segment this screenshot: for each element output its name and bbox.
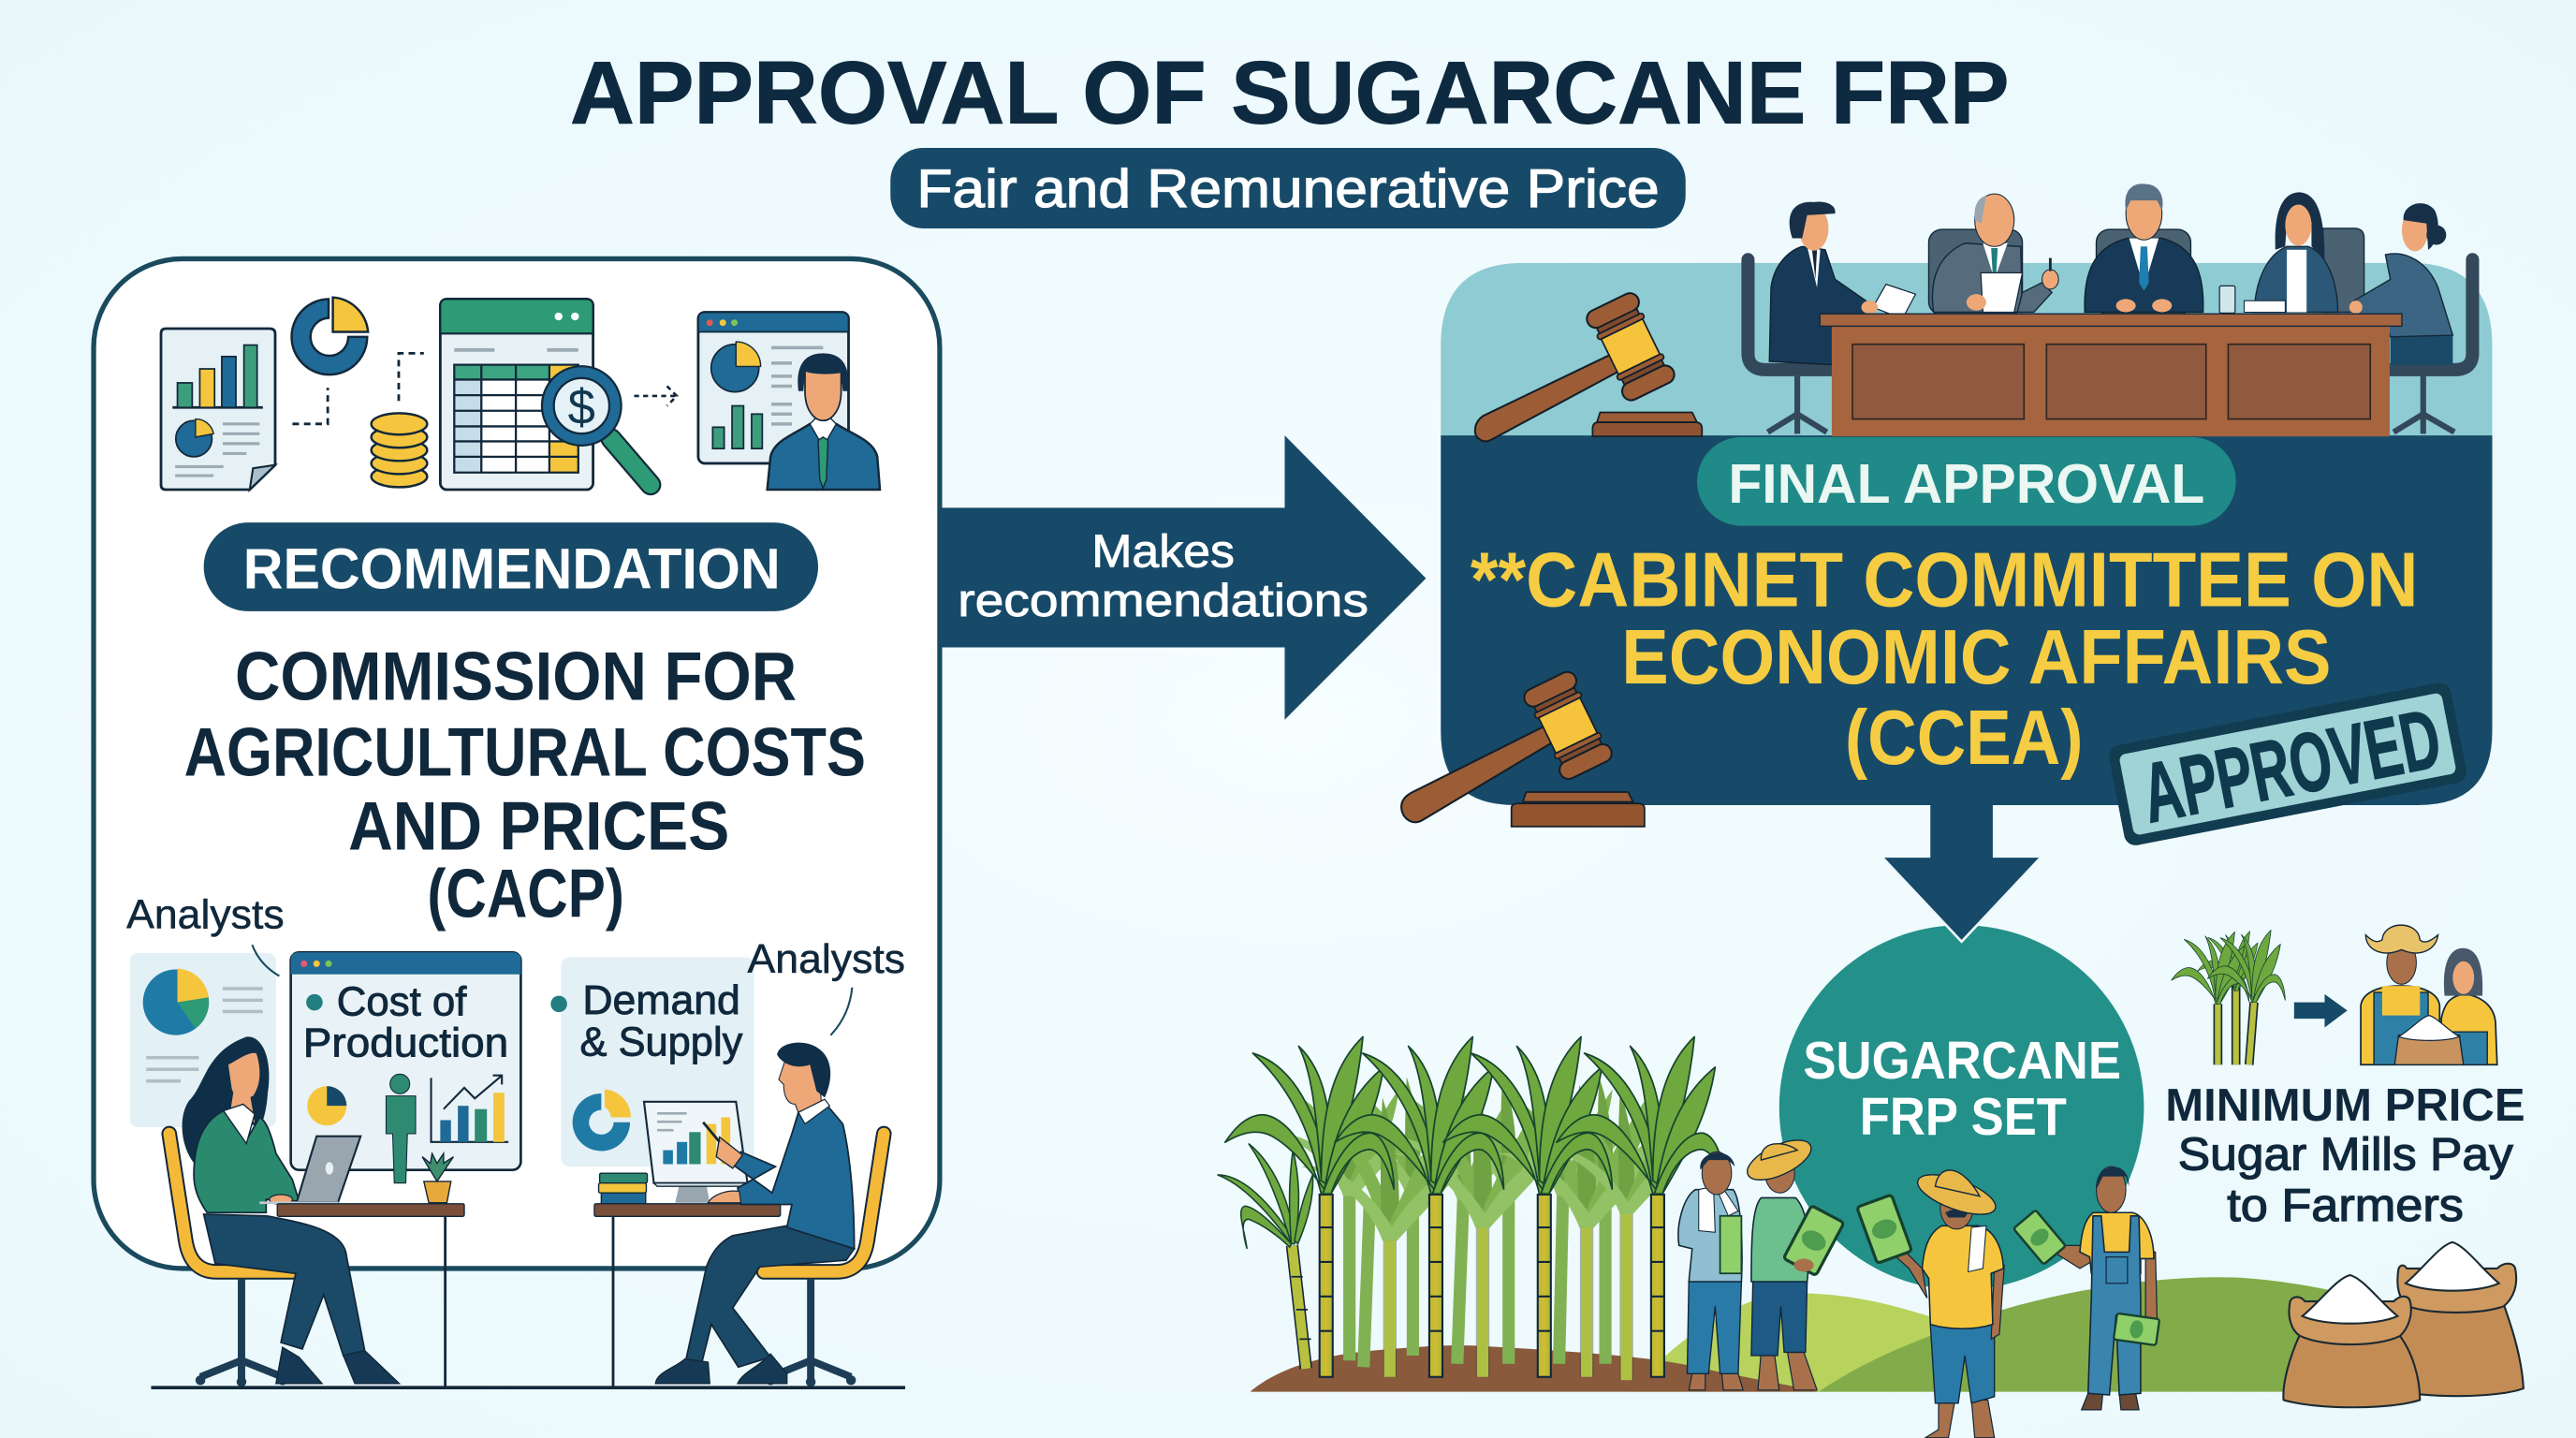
arrow: makes recommendations [940, 435, 1426, 720]
FRP set circle: FRP SET [1860, 1087, 2067, 1146]
icon: small cane stalks [2172, 931, 2285, 1064]
heading: commission: AND PRICES [348, 786, 729, 864]
card: cost of production: Production [303, 1020, 508, 1066]
icon: computer monitor [644, 1102, 748, 1203]
heading: commission: AGRICULTURAL COSTS [184, 712, 866, 790]
icon: arrow to farmers [2294, 994, 2348, 1027]
minimum price text: Sugar Mills Pay [2178, 1130, 2513, 1181]
member 5 [2349, 203, 2472, 433]
front stalks [1320, 1195, 1664, 1377]
front sack [2283, 1275, 2420, 1407]
member 2 [1928, 194, 2058, 315]
minimum price text: MINIMUM PRICE [2165, 1080, 2525, 1131]
icon: spreadsheet with magnifier [440, 299, 651, 490]
back stalks [1276, 1072, 1695, 1380]
back sack [2395, 1242, 2524, 1396]
member 4 [2244, 192, 2364, 312]
card: demand and supply [550, 958, 754, 1167]
connector dashes [292, 353, 424, 424]
figure: man analyst [655, 1043, 884, 1387]
subtitle pill: Fair and Remunerative Price [916, 159, 1660, 219]
icon: spreadsheet with magnifier: $ [568, 380, 595, 435]
icon: gavel on navy panel [1401, 668, 1645, 827]
card: demand and supply: & Supply [580, 1019, 742, 1064]
icon: farmers with sugar [2361, 925, 2497, 1064]
icon: report document [161, 329, 275, 490]
icon: books [599, 1173, 648, 1204]
heading: commission: (CACP) [427, 854, 624, 932]
recommendation label pill: RECOMMENDATION [243, 536, 781, 601]
heading: commission [184, 638, 866, 932]
floor line [151, 1387, 905, 1388]
FRP set circle [1779, 925, 2144, 1290]
final approval pill: FINAL APPROVAL [1728, 452, 2204, 515]
heading: cabinet committee: **CABINET COMMITTEE ON [1471, 537, 2419, 624]
committee members at table [1748, 183, 2472, 436]
label: analysts right [748, 936, 905, 1035]
member 3 [2085, 183, 2203, 315]
small tilted cane [1218, 1144, 1313, 1369]
card: demand and supply: Demand [582, 977, 740, 1023]
heading: cabinet committee: (CCEA) [1845, 695, 2083, 781]
arrow: down to FRP [1884, 805, 2039, 940]
farmer 4 [2013, 1167, 2159, 1410]
arrow: to analyst dashboard [634, 386, 677, 406]
heading: cabinet committee: ECONOMIC AFFAIRS [1621, 614, 2331, 700]
panel: final approval [1441, 183, 2492, 805]
label: analysts right: Analysts [748, 936, 905, 982]
final approval pill [1697, 437, 2236, 526]
table [1820, 314, 2402, 436]
sugar sacks [2283, 1242, 2524, 1407]
icon: coin stack [372, 413, 427, 487]
member 1 [1748, 202, 1915, 433]
heading: cabinet committee [1471, 537, 2419, 781]
card: cost of production: Cost of [337, 979, 467, 1025]
soil [1251, 1345, 1819, 1392]
subtitle pill [890, 148, 1686, 228]
icon: donut chart [292, 298, 368, 374]
minimum price text [2165, 1080, 2525, 1231]
icon: potted plant [422, 1153, 453, 1203]
sugarcane field [1218, 1036, 1819, 1392]
title: APPROVAL OF SUGARCANE FRP [570, 44, 2009, 143]
FRP set circle: SUGARCANE [1803, 1031, 2121, 1090]
hills [1630, 1277, 2513, 1392]
card: cost of production [291, 952, 520, 1183]
icon: gavel on teal band [1475, 290, 1702, 441]
figure: woman analyst [169, 1036, 399, 1387]
arrow: makes recommendations: Makes [1091, 527, 1235, 578]
pale chart card [130, 953, 276, 1127]
desk right [594, 1204, 781, 1387]
farmer 3 [1857, 1167, 2004, 1438]
heading: commission: COMMISSION FOR [235, 638, 797, 715]
minimum price text: to Farmers [2227, 1181, 2464, 1231]
arrow: makes recommendations: recommendations [958, 576, 1368, 626]
label: analysts left [126, 892, 285, 976]
farmer 2 [1742, 1132, 1844, 1390]
recommendation label pill [204, 522, 818, 611]
label: analysts left: Analysts [126, 892, 285, 938]
panel: recommendation [94, 258, 940, 1387]
desk left [277, 1204, 464, 1387]
icon: dashboard with analyst [698, 312, 880, 490]
farmer 1 [1678, 1152, 1743, 1390]
stamp: approved [2107, 681, 2468, 847]
